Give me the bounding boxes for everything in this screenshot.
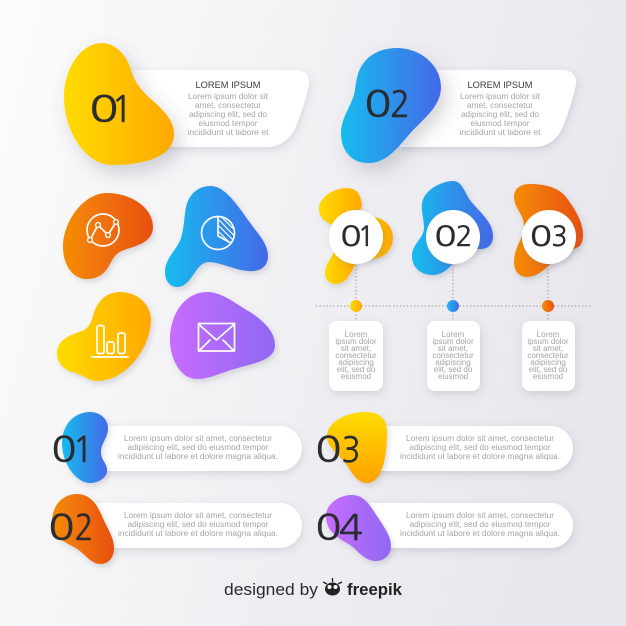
card: step 3: eiusmod xyxy=(533,372,563,381)
card: step 3: Lorem xyxy=(537,330,560,339)
card: step 3 xyxy=(522,321,575,391)
step blob: orange 03 xyxy=(514,184,583,277)
timeline: dotted connectors xyxy=(316,262,592,321)
text block: Lorem ipsum dolor sit xyxy=(460,92,541,101)
timeline dot: yellow xyxy=(350,300,362,312)
list item 03 xyxy=(316,412,573,483)
list item 03: adipiscing elit, sed do eiusmod tempor xyxy=(410,443,551,452)
list item 01: 0 xyxy=(52,433,76,468)
card: step 2: sit amet, xyxy=(438,344,468,353)
number 02: 0 xyxy=(364,87,392,123)
step blob: blue 02 xyxy=(412,181,493,275)
card: step 1: sit amet, xyxy=(341,344,371,353)
card: step 1 xyxy=(329,321,383,391)
list item 02: adipiscing elit, sed do eiusmod tempor xyxy=(128,520,269,529)
card: step 1: elit, sed do xyxy=(337,365,376,374)
step blob: yellow 01 xyxy=(319,188,393,284)
text block: Lorem ipsum dolor sit xyxy=(188,92,269,101)
list item 04: 4 xyxy=(339,511,363,546)
list item 02: Lorem ipsum dolor sit amet, consectetur xyxy=(124,511,272,520)
text block xyxy=(460,92,541,137)
card: step 3: elit, sed do xyxy=(529,365,568,374)
card: step 3: ipsum dolor xyxy=(527,337,569,346)
list item 04: 0 xyxy=(316,511,342,546)
timeline dot: blue xyxy=(447,300,459,312)
step blob: blue 02: 0 xyxy=(434,223,456,251)
text block: adipiscing elit, sed do xyxy=(461,110,539,119)
text block: eiusmod tempor xyxy=(470,119,530,128)
number 02: 2 xyxy=(390,87,410,123)
step blob: orange 03: 3 xyxy=(552,223,568,251)
number 01: 1 xyxy=(111,92,133,128)
card: step 2: elit, sed do xyxy=(434,365,473,374)
number 01: 0 xyxy=(90,92,118,128)
text block: incididunt ut labore et xyxy=(460,128,541,137)
footer: designed by freepik: freepik xyxy=(347,580,403,599)
icon blob: yellow bar chart xyxy=(57,292,151,381)
icon blob: blue pie chart xyxy=(165,186,268,287)
card: step 2: Lorem xyxy=(442,330,465,339)
card: step 2: consectetur xyxy=(432,351,474,360)
list item 02: 0 xyxy=(48,511,74,546)
number 02 xyxy=(364,87,410,123)
panel: top card 02 xyxy=(341,48,576,163)
list item 01: incididunt ut labore et dolore magna aliqua. xyxy=(118,452,278,461)
footer: designed by freepik: designed by xyxy=(224,581,319,599)
list item 02: incididunt ut labore et dolore magna aliqua. xyxy=(118,529,278,538)
timeline dot: orange xyxy=(542,300,554,312)
text block: adipiscing elit, sed do xyxy=(189,110,267,119)
card: step 1: ipsum dolor xyxy=(335,337,377,346)
text block xyxy=(188,92,269,137)
text block: incididunt ut labore et xyxy=(188,128,269,137)
card: step 1: eiusmod xyxy=(341,372,371,381)
card: step 2 xyxy=(427,321,480,391)
list item 02 xyxy=(48,494,302,564)
step blob: yellow 01: 0 xyxy=(340,223,362,251)
icon blob: purple envelope xyxy=(170,292,275,379)
card: step 1: Lorem xyxy=(345,330,368,339)
panel: top card 01 xyxy=(64,43,309,165)
card: step 1: consectetur xyxy=(335,351,377,360)
list item 03: Lorem ipsum dolor sit amet, consectetur xyxy=(406,434,554,443)
footer: designed by freepik xyxy=(224,578,403,599)
list item 04: incididunt ut labore et dolore magna aliqua. xyxy=(400,529,560,538)
step blob: yellow 01: 1 xyxy=(358,223,374,251)
heading: LOREM IPSUM xyxy=(196,80,261,91)
list item 03: 0 xyxy=(316,433,342,468)
list item 03: 3 xyxy=(342,433,360,468)
icon blob: orange network xyxy=(63,193,153,279)
blob: blue 02 xyxy=(341,48,441,163)
card: step 2: ipsum dolor xyxy=(432,337,474,346)
list item 02: 2 xyxy=(74,511,94,546)
list item 04: Lorem ipsum dolor sit amet, consectetur xyxy=(406,511,554,520)
list item 03: incididunt ut labore et dolore magna aliqua. xyxy=(400,452,560,461)
card: step 3: adipiscing xyxy=(530,358,566,367)
heading: LOREM IPSUM xyxy=(468,80,533,91)
list item 04 xyxy=(316,495,573,561)
card: step 3: consectetur xyxy=(527,351,569,360)
card: step 1: adipiscing xyxy=(338,358,374,367)
card: step 3: sit amet, xyxy=(533,344,563,353)
text block: amet, consectetur xyxy=(195,101,261,110)
list item 01 xyxy=(52,412,302,483)
list item 01: 1 xyxy=(72,433,94,468)
text block: amet, consectetur xyxy=(467,101,533,110)
step blob: blue 02: 2 xyxy=(456,223,472,251)
step blob: orange 03: 0 xyxy=(530,223,552,251)
list item 04: adipiscing elit, sed do eiusmod tempor xyxy=(410,520,551,529)
card: step 2: adipiscing xyxy=(435,358,471,367)
card: step 2: eiusmod xyxy=(438,372,468,381)
list item 01: adipiscing elit, sed do eiusmod tempor xyxy=(128,443,269,452)
list item 01: Lorem ipsum dolor sit amet, consectetur xyxy=(124,434,272,443)
number 01 xyxy=(90,92,133,128)
text block: eiusmod tempor xyxy=(198,119,258,128)
blob: yellow 01 xyxy=(64,43,174,165)
